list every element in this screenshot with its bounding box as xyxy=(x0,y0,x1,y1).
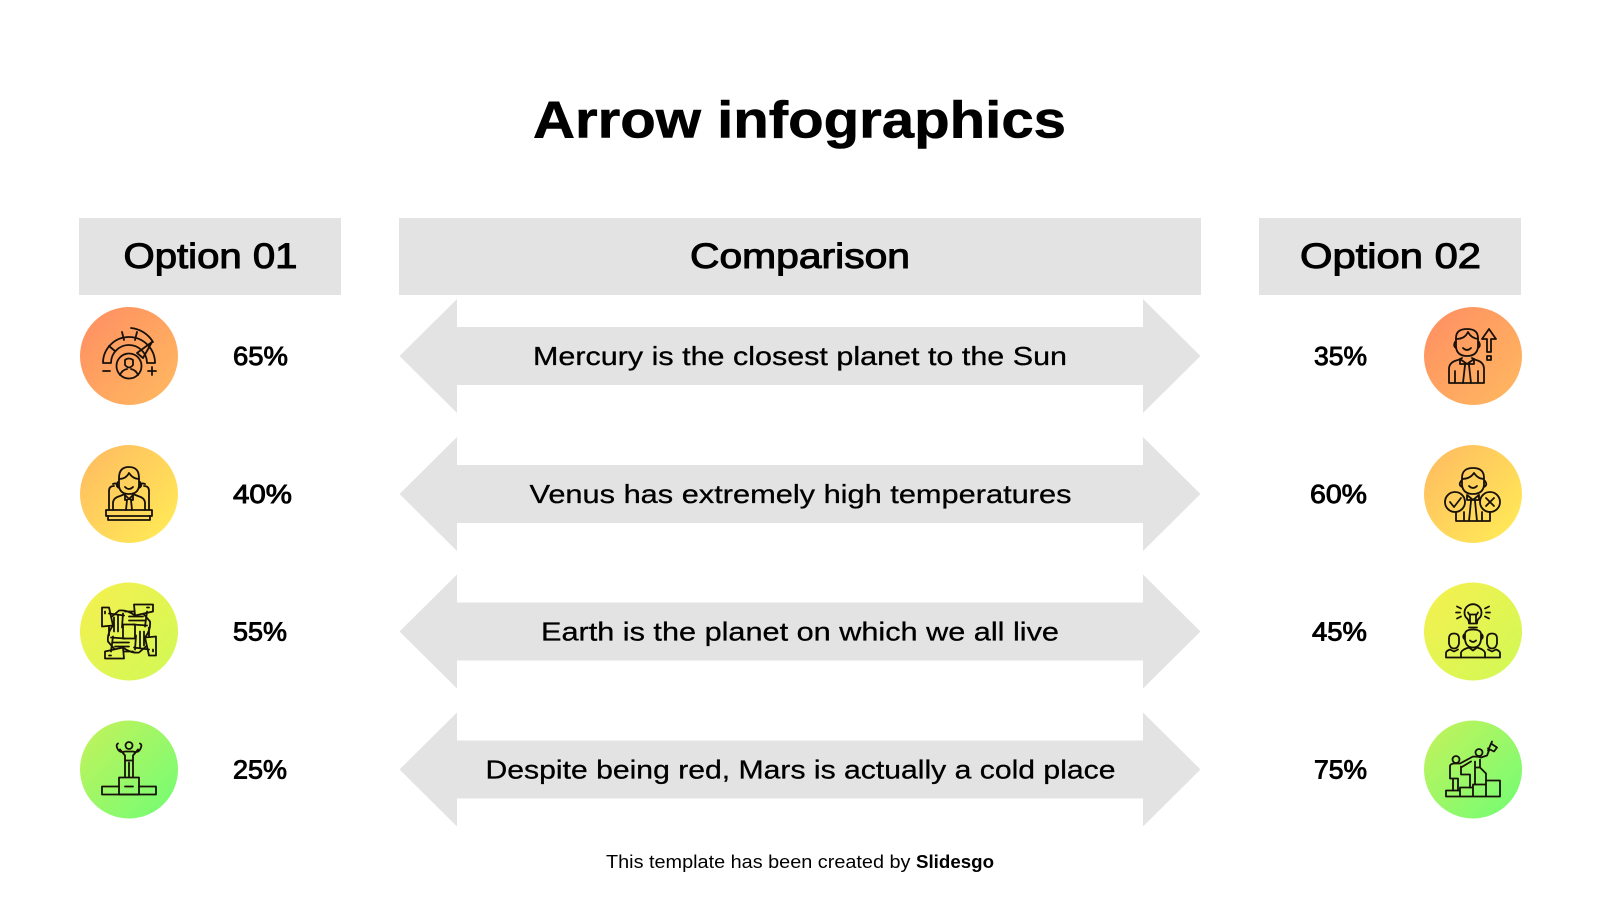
circle icon: performance gauge xyxy=(80,307,178,405)
footer credit: Slidesgo xyxy=(916,852,994,872)
double arrow 2 xyxy=(400,437,1200,551)
circle icon: climbing steps with flag xyxy=(1424,720,1522,818)
row 4: Mars xyxy=(80,712,1522,826)
circle icon: speaker at podium xyxy=(80,445,178,543)
value: option 2 Earth: 45% xyxy=(1312,616,1367,646)
value: option 1 Mars: 25% xyxy=(233,754,287,784)
header: Option 01 xyxy=(79,218,341,295)
header: Option 01: Option 01 xyxy=(124,237,298,276)
footer credit: This template has been created by xyxy=(606,852,916,872)
value: option 1 Venus: 40% xyxy=(233,479,292,509)
value: option 2 Mars: 75% xyxy=(1314,754,1367,784)
header: Option 02: Option 02 xyxy=(1300,237,1481,276)
header: Option 02 xyxy=(1259,218,1521,295)
arrow text 3: Earth is the planet on which we all live xyxy=(541,616,1059,646)
title: Arrow infographics xyxy=(533,92,1066,150)
row 3: Earth xyxy=(80,574,1522,688)
arrow text 2: Venus has extremely high temperatures xyxy=(530,479,1072,509)
row 2: Venus xyxy=(80,437,1522,551)
circle icon: person choosing check or cross xyxy=(1424,445,1522,543)
arrow text 1: Mercury is the closest planet to the Sun xyxy=(533,341,1067,371)
double arrow 1 xyxy=(400,299,1200,413)
value: option 1 Earth: 55% xyxy=(233,616,287,646)
double arrow 4 xyxy=(400,712,1200,826)
header: Comparison xyxy=(399,218,1201,295)
header: Comparison: Comparison xyxy=(690,237,910,276)
value: option 2 Mercury: 35% xyxy=(1314,341,1367,371)
value: option 2 Venus: 60% xyxy=(1310,479,1367,509)
double arrow 3 xyxy=(400,574,1200,688)
row 1: Mercury xyxy=(80,299,1522,413)
circle icon: employee with up arrow xyxy=(1424,307,1522,405)
circle icon: winner on podium xyxy=(80,720,178,818)
value: option 1 Mercury: 65% xyxy=(233,341,288,371)
circle icon: joined hands xyxy=(80,582,178,680)
arrow text 4: Despite being red, Mars is actually a cold place xyxy=(486,754,1116,784)
circle icon: team with idea bulb xyxy=(1424,582,1522,680)
